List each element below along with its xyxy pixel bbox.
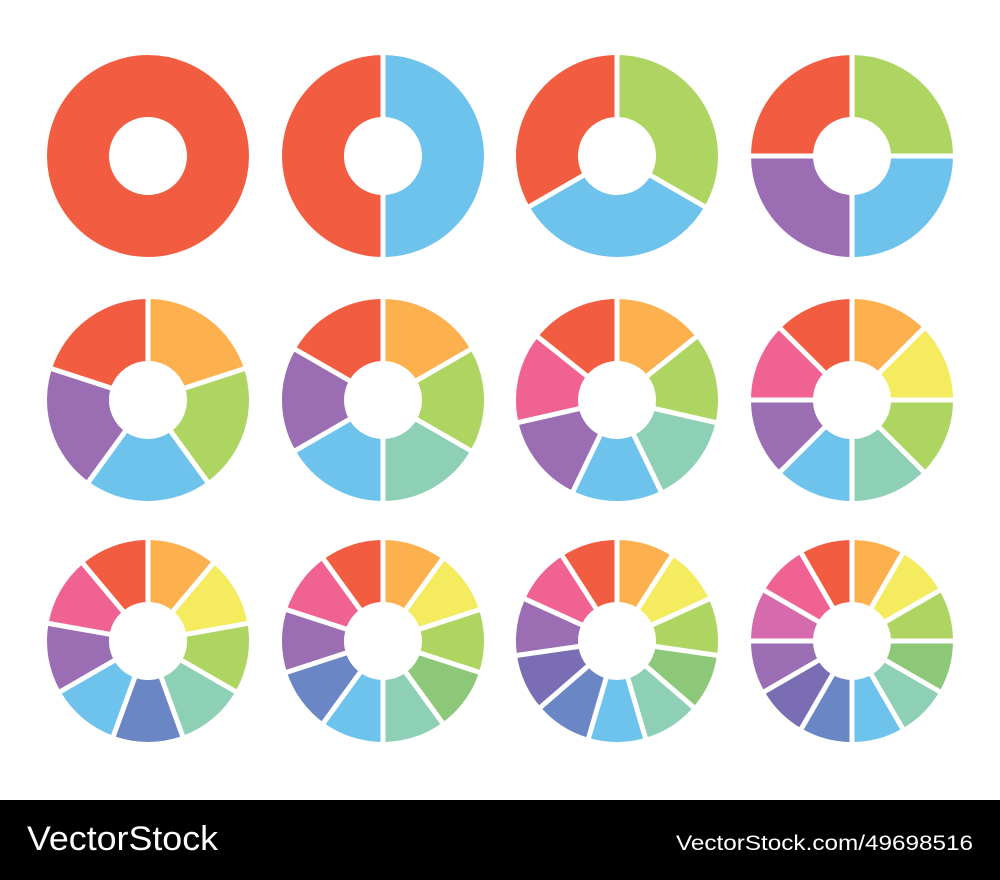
donut: 9 segments [40,531,256,744]
footer id text: VectorStock.com/49698516 [676,832,973,855]
donut: 10 segments [278,531,488,751]
donut: 3 segments [521,46,713,252]
donut: 5 segments [43,290,253,498]
donut: 6 segments [287,290,479,510]
donut: 1 segment [78,86,218,226]
donut: 2 segments [313,46,453,266]
donut: 7 segments [510,290,724,499]
footer bar [0,800,1000,880]
donut: 8 segments [742,290,962,510]
donut: 4 segments [742,46,962,266]
footer logo text: VectorStock [27,820,219,858]
donut: 12 segments [742,531,962,751]
donut: 11 segments [508,531,726,747]
